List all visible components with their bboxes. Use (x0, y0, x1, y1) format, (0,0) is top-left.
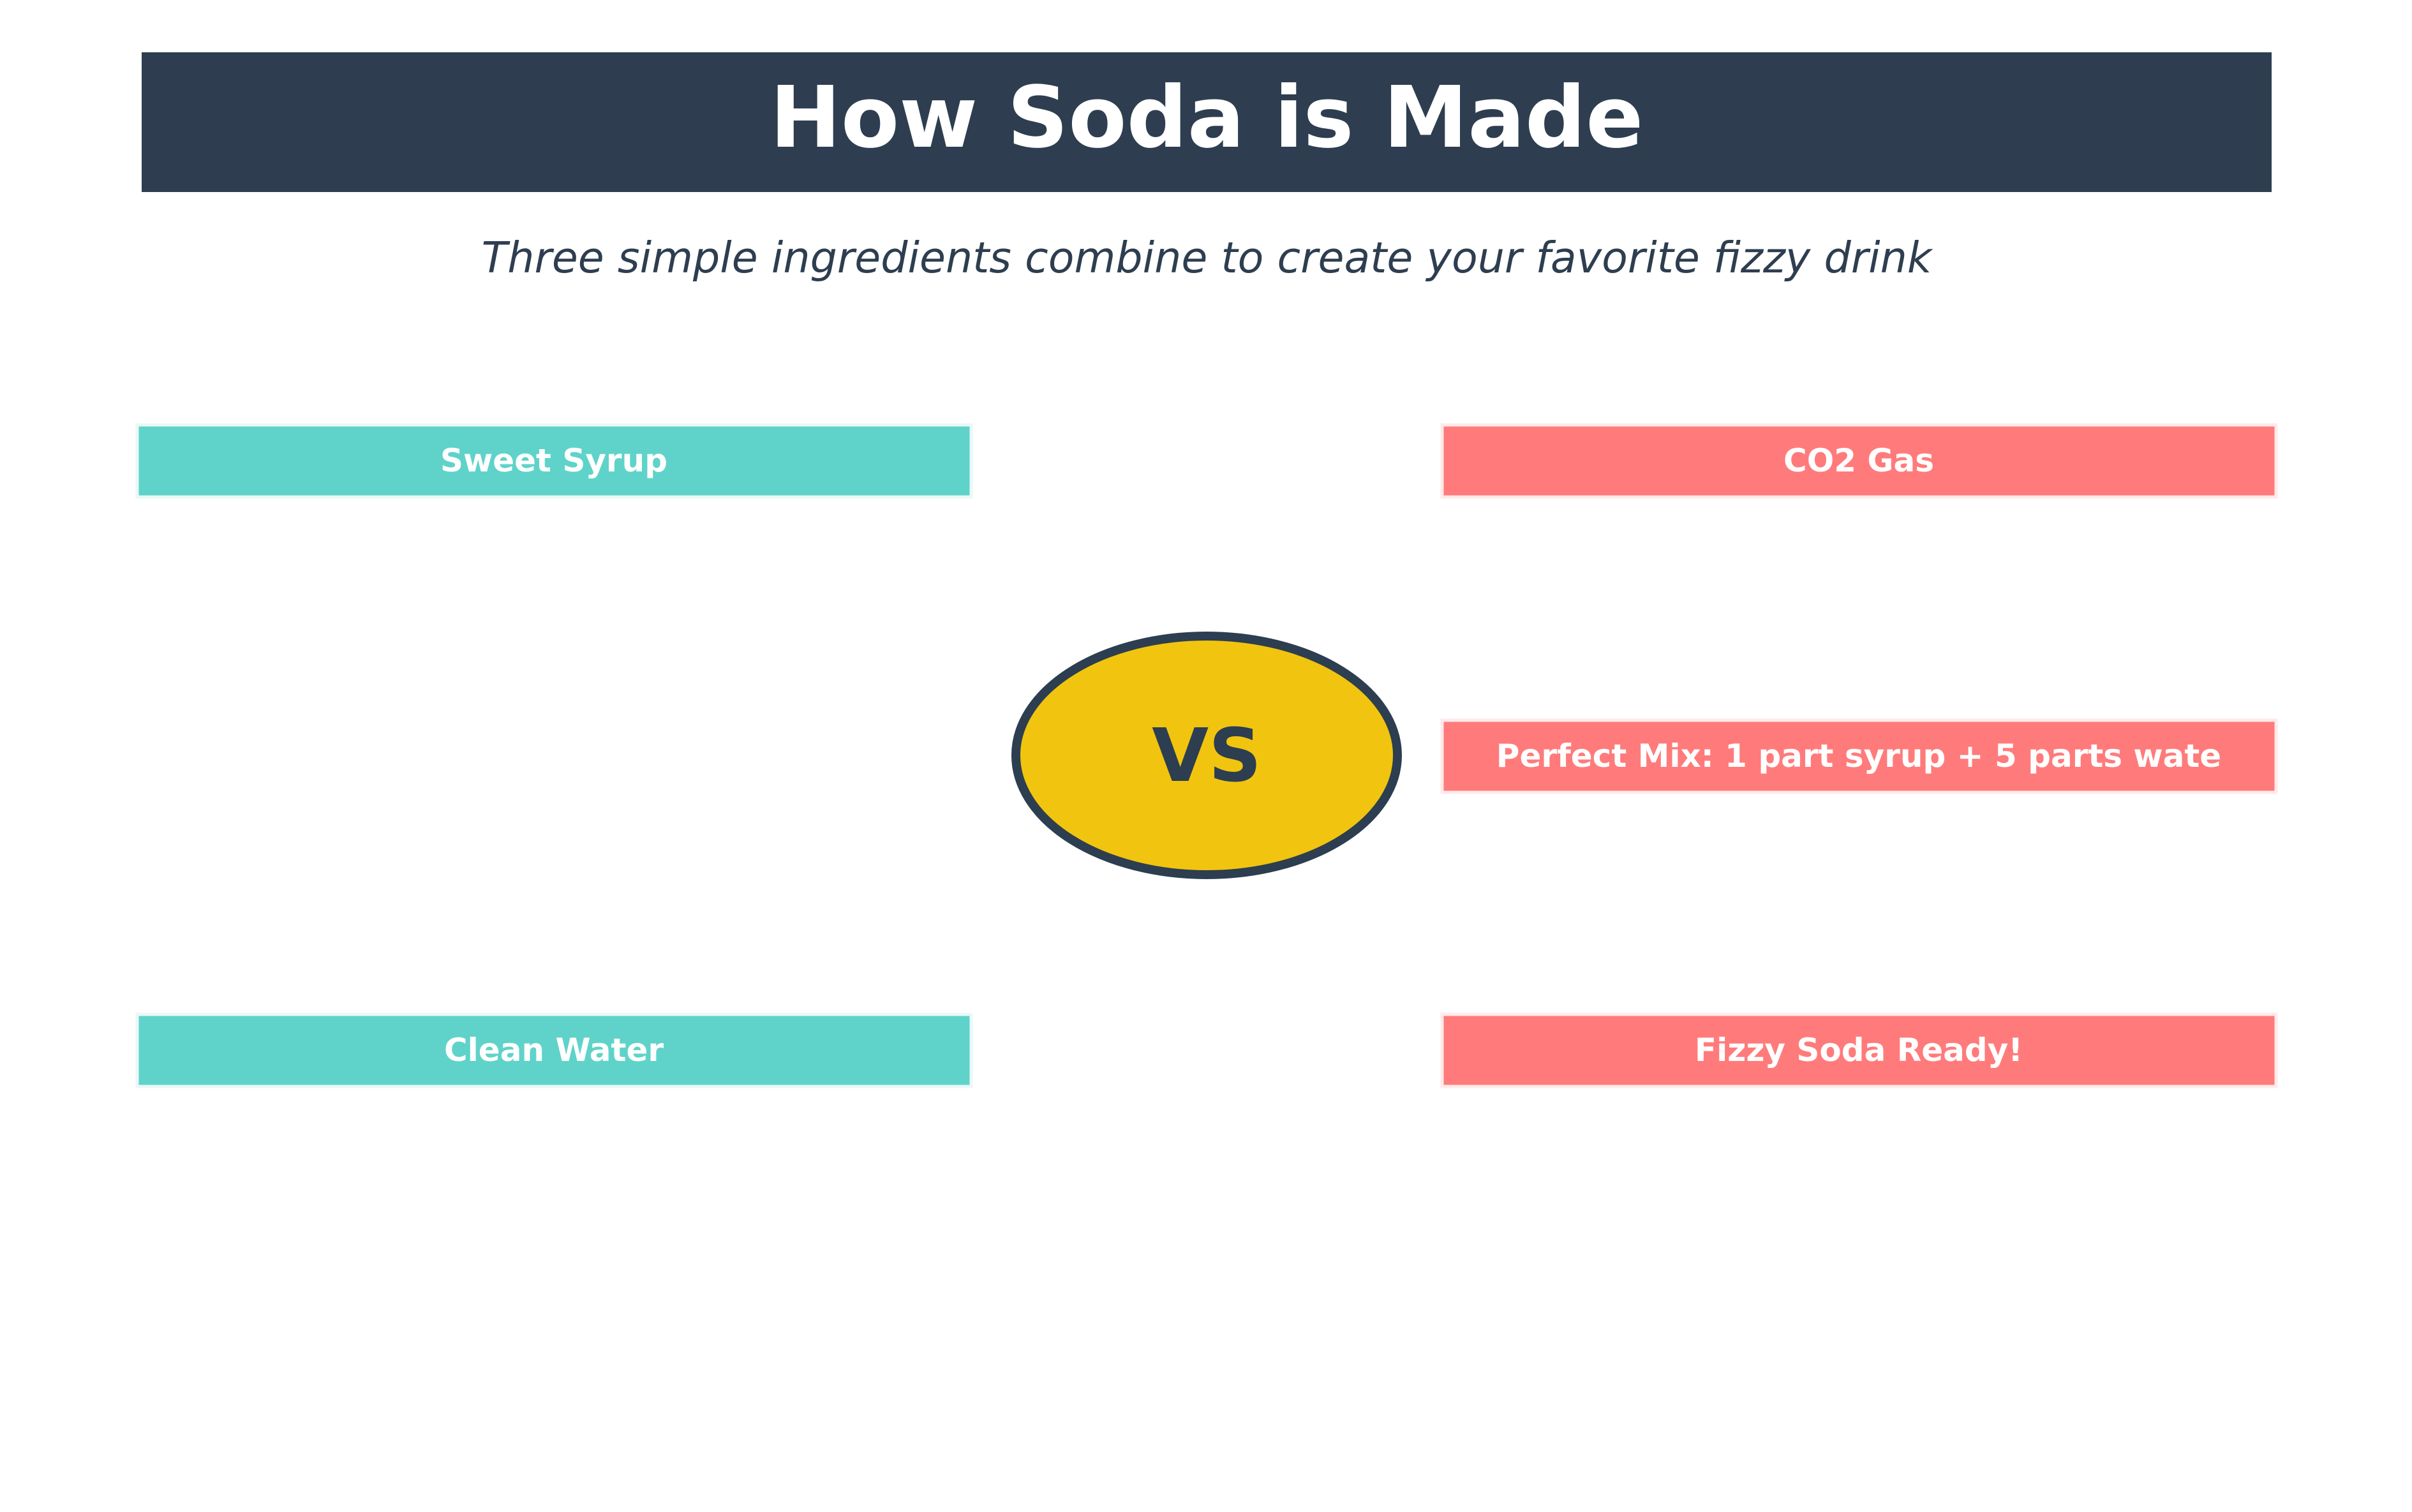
panel: Fizzy Soda Ready (1442, 1014, 2276, 1086)
icon: VS ellipse (1016, 636, 1397, 875)
subtitle: Three simple ingredients combine to create your favorite fizzy drink (482, 233, 1933, 283)
panel: Perfect Mix: Perfect Mix: 1 part syrup + 5 parts wate (1496, 737, 2221, 775)
panel: Sweet Syrup (137, 425, 971, 497)
panel: Clean Water: Clean Water (444, 1032, 664, 1069)
panel: Fizzy Soda Ready: Fizzy Soda Ready! (1695, 1032, 2023, 1069)
panel: CO2 Gas (1442, 425, 2276, 497)
title: How Soda is Made (770, 69, 1643, 167)
icon: VS ellipse: VS (1152, 713, 1262, 799)
panel: Sweet Syrup: Sweet Syrup (440, 442, 667, 479)
title (142, 52, 2272, 192)
panel: Clean Water (137, 1014, 971, 1086)
panel: CO2 Gas: CO2 Gas (1783, 442, 1934, 479)
panel: Perfect Mix (1442, 720, 2276, 792)
